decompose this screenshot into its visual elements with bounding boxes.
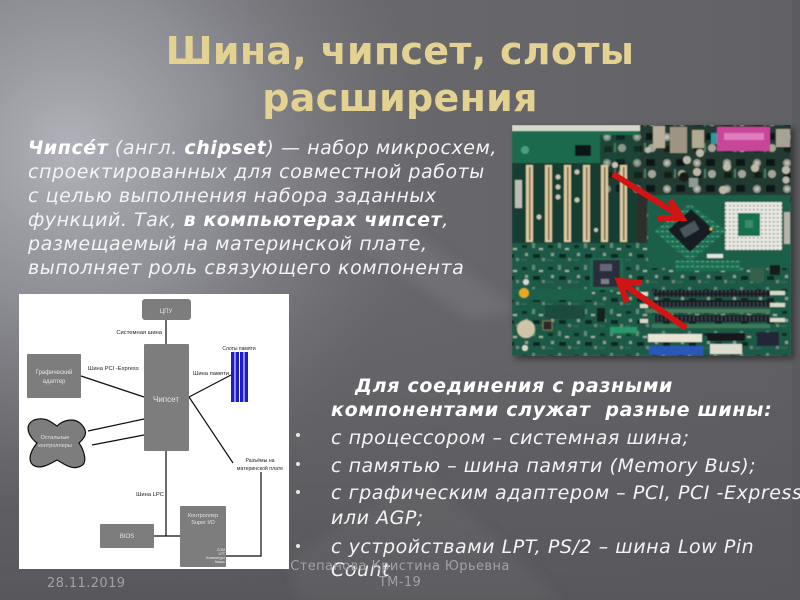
- text block: buses list: с графическим адаптером – PCI, PCI -Express: [331, 482, 800, 504]
- box: Super I/O controller: [180, 506, 226, 567]
- text block: chipset definition: функций. Так, в компьютерах чипсет,: [28, 209, 449, 231]
- arrow: to south bridge: [619, 281, 686, 328]
- text block: buses list: [296, 375, 800, 581]
- text block: buses list: компонентами служат разные шины:: [331, 399, 772, 421]
- battery and jumper: [517, 320, 535, 338]
- I/O connectors: [653, 126, 665, 148]
- box: CPU: ЦПУ: [160, 309, 172, 315]
- RAM slots: [653, 290, 770, 297]
- box: Super I/O controller: Super I/O: [191, 520, 215, 526]
- footer: date: 28.11.2019: [47, 576, 125, 591]
- chipset north bridge: [654, 204, 726, 262]
- text block: chipset definition: [28, 137, 497, 279]
- text block: chipset definition: спроектированных для совместной работы: [28, 161, 485, 183]
- bus labels: [88, 330, 283, 498]
- box: graphics adapter: [27, 354, 81, 398]
- bus labels: Разъёмы на: [246, 458, 275, 464]
- text block: buses list: или AGP;: [331, 507, 424, 529]
- bus labels: Шина LPC: [136, 492, 164, 498]
- memory slots: [231, 352, 248, 402]
- text block: buses list: Count: [331, 559, 390, 581]
- box: graphics adapter: адаптер: [43, 379, 66, 385]
- bus labels: Слоты памяти: [222, 346, 256, 352]
- bus labels: Системная шина: [116, 330, 163, 336]
- footer: author: Степанова Кристина Юрьевна ТМ-19: [290, 559, 510, 590]
- cloud: other controllers: Остальные: [41, 435, 69, 441]
- box: BIOS: BIOS: [120, 534, 134, 540]
- photo: motherboard with arrows: [512, 125, 791, 356]
- box: Super I/O controller: COM: [217, 548, 225, 552]
- text block: buses list: Для соединения с разными: [355, 375, 673, 397]
- box: Super I/O controller: Мышь: [215, 560, 225, 564]
- text block: chipset definition: выполняет роль связующего компонента: [28, 257, 464, 279]
- capacitors: [645, 147, 790, 194]
- cloud: other controllers: [28, 419, 85, 468]
- arrow: to north bridge: [613, 174, 682, 218]
- box: Super I/O controller: Клавиатура: [206, 556, 225, 560]
- text block: chipset definition: с целью выполнения набора заданных: [28, 185, 437, 207]
- text block: chipset definition: размещаемый на материнской плате,: [28, 233, 428, 255]
- traces and small parts: [675, 261, 740, 271]
- text block: buses list: с процессором – системная шина;: [331, 427, 689, 449]
- text block: buses list: с устройствами LPT, PS/2 – шина Low Pin: [331, 536, 754, 558]
- box: chipset: Чипсет: [153, 395, 179, 404]
- title: Шина, чипсет, слоты расширения: [166, 29, 634, 120]
- PCI slots: [526, 165, 627, 242]
- diagram: chipset block scheme: [19, 294, 289, 569]
- bus labels: Шина PCI -Express: [88, 366, 139, 372]
- box: chipset: [144, 344, 189, 451]
- box: Super I/O controller: Контроллер: [188, 513, 218, 519]
- bus labels: материнской плате: [237, 465, 283, 472]
- box: graphics adapter: Графический: [36, 369, 72, 376]
- box: Super I/O controller: LPT: [219, 552, 226, 556]
- connectors: [648, 334, 702, 342]
- text block: buses list: с памятью – шина памяти (Memory Bus);: [331, 455, 756, 477]
- bus labels: Шина памяти: [193, 371, 229, 377]
- box: BIOS: [100, 524, 154, 548]
- box: CPU: [142, 299, 191, 320]
- text block: chipset definition: Чипсе́т (англ. chipset) — набор микросхем,: [28, 137, 497, 159]
- cloud: other controllers: контроллеры: [38, 443, 72, 449]
- south bridge: [590, 258, 623, 290]
- CPU socket: [725, 202, 782, 250]
